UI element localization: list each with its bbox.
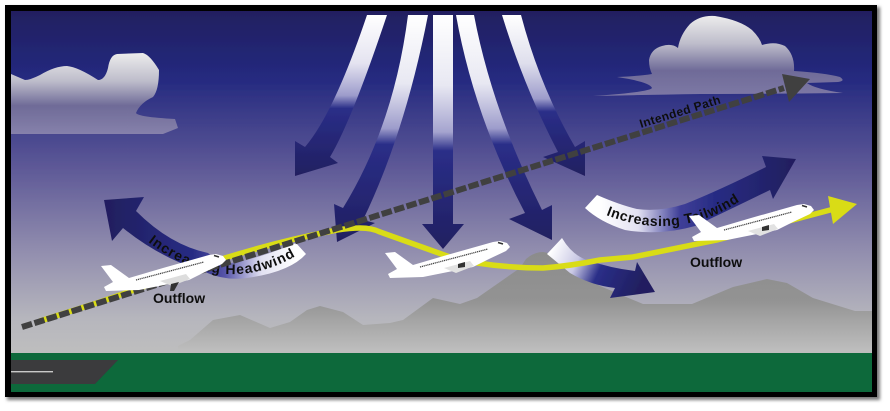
cloud: left <box>11 53 178 134</box>
wind arrow: increasing headwind <box>104 197 306 279</box>
wind arrow: downdraft 1 <box>295 15 387 176</box>
label: increasing tailwind: Increasing Tailwind <box>606 193 739 228</box>
ground <box>11 353 872 392</box>
label: outflow left: Outflow <box>153 290 205 306</box>
cloud: right <box>593 16 843 96</box>
runway centre line <box>11 371 53 372</box>
wind arrow: downdraft 4 <box>456 15 552 240</box>
airplane: near runway <box>101 254 226 291</box>
airplane: climbing right <box>689 204 814 241</box>
runway <box>11 360 118 384</box>
wind arrow: increasing tailwind <box>585 156 796 232</box>
intended path: dashed line <box>21 74 810 330</box>
label: increasing headwind: Increasing Headwind <box>148 235 294 276</box>
wind arrow: downdraft 5 <box>502 15 585 176</box>
wind arrow: downdraft 3 <box>422 15 464 249</box>
airplane: mid <box>385 241 510 278</box>
yellow arrowhead <box>828 196 857 224</box>
label: outflow right: Outflow <box>690 254 742 270</box>
wind arrow: downdraft 2 <box>334 15 428 242</box>
actual flight path: yellow <box>40 196 857 321</box>
label: intended path: Intended Path <box>639 96 720 128</box>
intended path arrowhead <box>782 74 810 102</box>
wind arrow: outflow near mountain <box>547 238 655 298</box>
mountains <box>178 252 872 353</box>
